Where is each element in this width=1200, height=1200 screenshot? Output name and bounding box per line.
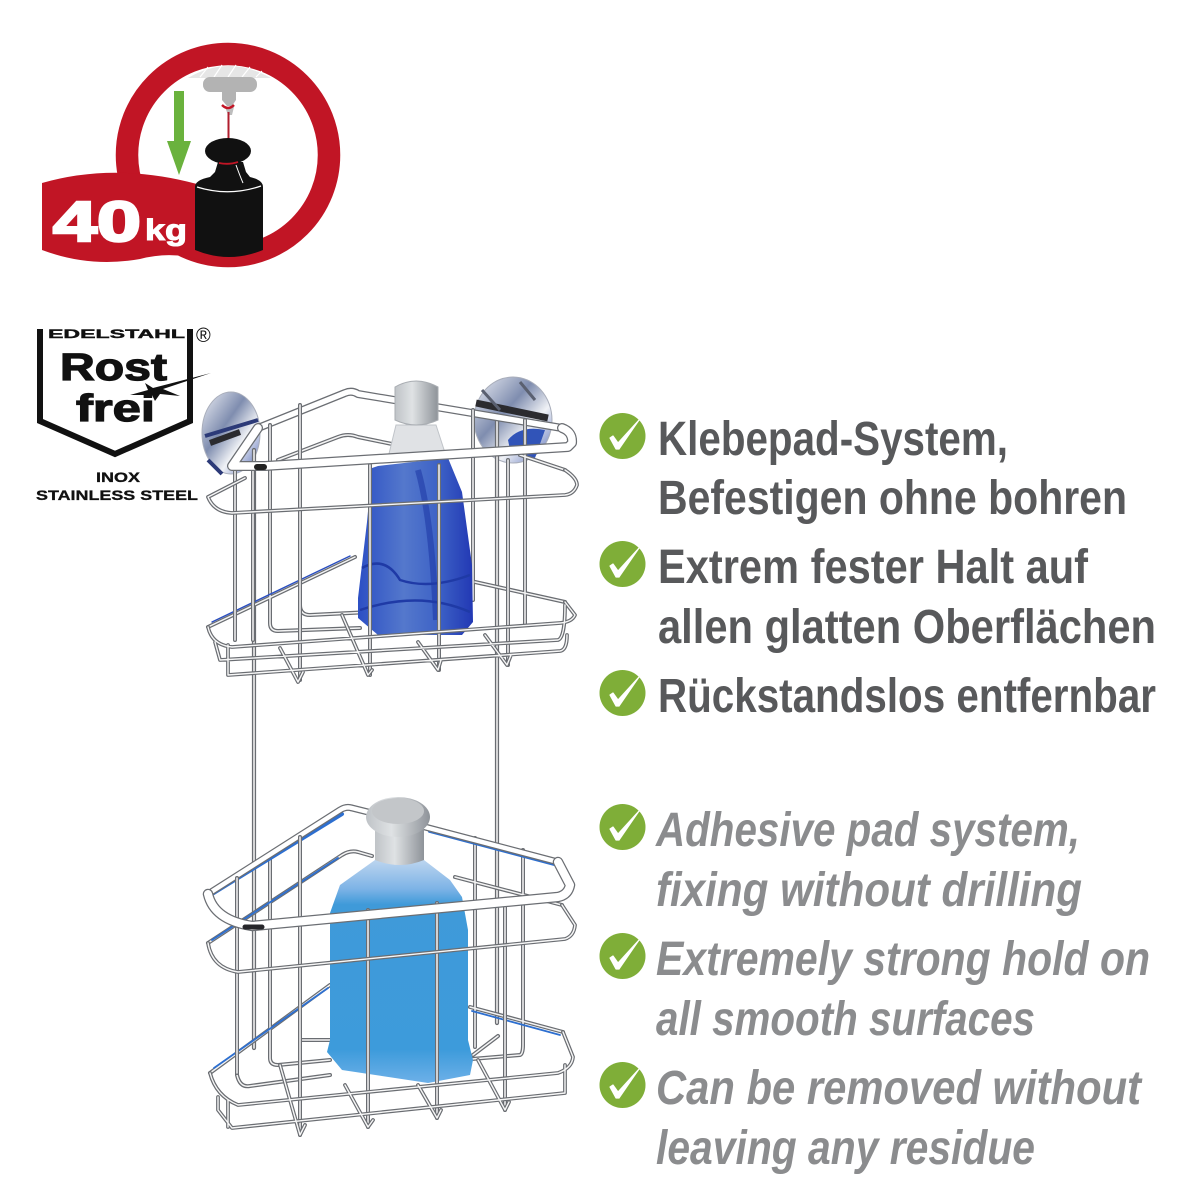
logo: Rostfrei stainless steel xyxy=(36,325,211,503)
green arrow xyxy=(167,91,191,175)
item: strong hold xyxy=(600,541,1156,654)
upper basket front band xyxy=(232,428,572,467)
wall pad left xyxy=(202,392,260,474)
clock-hand star xyxy=(130,373,211,401)
text: Rost: Rost xyxy=(60,347,167,389)
red banner xyxy=(42,173,205,262)
lower bottle xyxy=(327,797,473,1083)
wall pad right xyxy=(474,377,552,463)
text: Klebepad-System, xyxy=(658,413,1008,466)
lower basket front wires xyxy=(208,837,575,1135)
lower basket back band xyxy=(208,807,558,894)
text: frei: frei xyxy=(76,388,155,430)
icon: 40 kg load capacity xyxy=(42,54,329,262)
text: Inox: INOX xyxy=(96,470,140,485)
text: Extrem fester Halt auf xyxy=(658,541,1089,594)
item: removable xyxy=(600,670,1156,723)
red ring xyxy=(127,54,329,256)
lower basket back wires xyxy=(208,814,563,1086)
weight xyxy=(195,138,263,257)
check icon xyxy=(600,413,646,459)
check icon xyxy=(600,670,646,716)
text: Adhesive pad system, xyxy=(655,804,1080,857)
text line 2: fixing without drilling xyxy=(656,864,1082,917)
item: adhesive pad xyxy=(600,413,1127,525)
lower basket front band xyxy=(208,862,570,927)
check icon xyxy=(600,804,646,850)
product: two-tier chrome corner shelf xyxy=(202,377,577,1135)
text line 2: leaving any residue xyxy=(656,1122,1035,1175)
upper bottle xyxy=(358,381,473,635)
text: Stainless steel: STAINLESS STEEL xyxy=(36,488,198,503)
ceiling surface xyxy=(188,65,271,78)
item: removable xyxy=(600,1062,1143,1175)
text line 2: all smooth surfaces xyxy=(656,993,1035,1046)
item: strong hold xyxy=(600,933,1150,1046)
benefit list: German xyxy=(600,413,1156,723)
connecting long wires xyxy=(254,415,497,1048)
text: Can be removed without xyxy=(656,1062,1143,1115)
benefit list: English xyxy=(600,804,1150,1175)
item: adhesive pad xyxy=(600,804,1082,917)
check icon xyxy=(600,933,646,979)
registered mark: ® xyxy=(196,325,211,347)
upper basket back wires and back band xyxy=(208,392,565,631)
text: Edelstahl: EDELSTAHL xyxy=(48,327,185,341)
check icon xyxy=(600,541,646,587)
text: kg: kg xyxy=(145,214,187,247)
suction hook xyxy=(203,77,257,140)
text line 2: Befestigen ohne bohren xyxy=(658,472,1127,525)
shield outline xyxy=(40,329,190,454)
text: 40: 40 xyxy=(53,190,141,254)
check icon xyxy=(600,1062,646,1108)
upper basket front wires xyxy=(208,405,577,682)
